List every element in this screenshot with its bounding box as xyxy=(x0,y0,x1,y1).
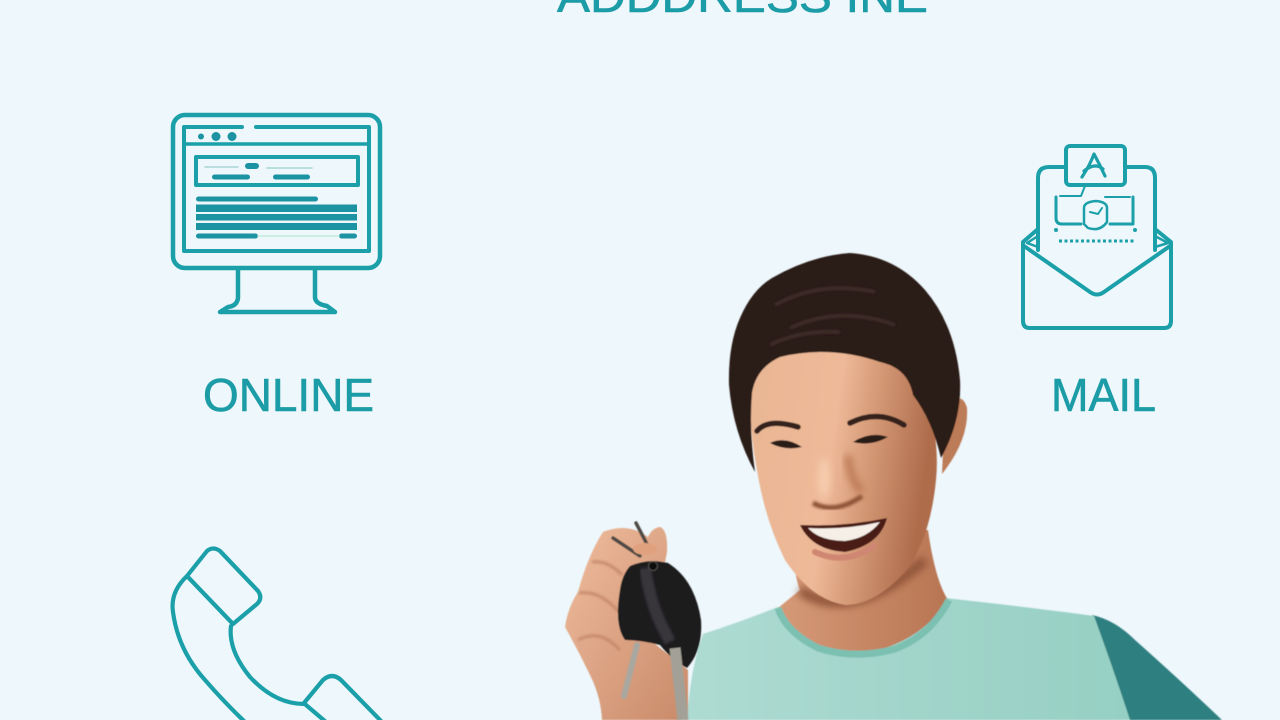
main key blade xyxy=(675,648,683,720)
face xyxy=(750,335,937,605)
chin shadow xyxy=(800,560,925,602)
neck xyxy=(778,530,948,651)
fob hole xyxy=(648,562,658,570)
fob highlight xyxy=(645,568,670,642)
collar xyxy=(778,600,949,654)
finger shadows xyxy=(578,562,622,650)
shirt sleeve xyxy=(1092,615,1222,720)
icon: online monitor xyxy=(173,115,380,312)
label: online: ONLINE xyxy=(203,369,374,421)
hand xyxy=(565,527,688,720)
label: mail: MAIL xyxy=(1051,369,1156,421)
key fob xyxy=(618,561,701,668)
t-shirt body xyxy=(687,598,1130,720)
teeth xyxy=(808,522,880,541)
fingertip over ring xyxy=(633,543,657,555)
nose side shading xyxy=(848,455,862,492)
eyebrows xyxy=(757,416,904,431)
lower lip xyxy=(815,546,874,558)
mouth xyxy=(800,518,887,552)
nose shadow xyxy=(813,496,862,508)
icon: telephone xyxy=(173,548,382,720)
eyes xyxy=(770,435,888,448)
key ring xyxy=(613,523,650,556)
nose highlight xyxy=(818,458,830,498)
icon: mail envelope xyxy=(1023,146,1171,328)
hair xyxy=(729,253,960,472)
second key blade xyxy=(624,645,637,696)
photo: young man holding car keys xyxy=(565,253,1222,720)
hair highlights xyxy=(770,288,895,345)
ear xyxy=(942,398,967,474)
